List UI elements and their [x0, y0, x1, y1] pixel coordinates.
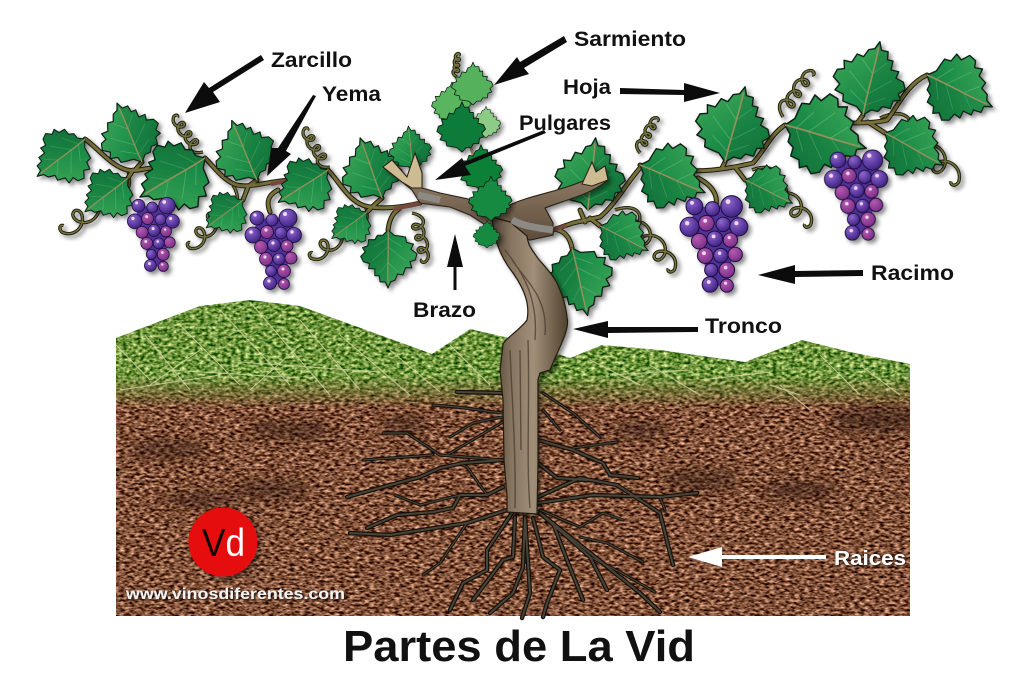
arrow: Racimo [758, 265, 863, 284]
label: Sarmiento [494, 28, 686, 85]
thumbs [383, 153, 608, 188]
tendrils [58, 54, 971, 274]
label: Zarcillo: Zarcillo [271, 49, 352, 72]
grass blades [116, 302, 900, 410]
arms [383, 153, 608, 240]
label: Tronco [573, 315, 782, 338]
vine canes and tendrils [58, 54, 971, 274]
label: Yema: Yema [322, 83, 381, 106]
label: Brazo: Brazo [413, 299, 476, 322]
label: Tronco: Tronco [705, 315, 782, 338]
arrow: Raices [688, 547, 826, 567]
leaves [20, 33, 1008, 323]
bark lines [505, 250, 545, 508]
central shoot leaves [432, 62, 512, 248]
canes outline [85, 75, 927, 248]
label: Pulgares: Pulgares [519, 112, 611, 135]
arrow: Sarmiento [494, 36, 567, 85]
logo: Vd: Vd [202, 522, 245, 565]
arrow: Brazo [447, 234, 463, 290]
label: Yema [267, 83, 381, 176]
arrow: Hoja [620, 83, 720, 102]
logo: Vd [188, 508, 258, 576]
soil [116, 372, 910, 616]
trunk and arms [383, 153, 608, 514]
shoot stem [468, 137, 483, 190]
arrow: Zarcillo [185, 55, 264, 113]
title: Partes de La Vid [343, 622, 695, 671]
label: Zarcillo [185, 49, 352, 113]
grape clusters [127, 150, 888, 292]
roots [347, 392, 697, 618]
label: Hoja: Hoja [563, 76, 611, 99]
label: Racimo: Racimo [871, 262, 954, 285]
brown cane bases [272, 168, 690, 230]
label: Racimo [758, 262, 954, 285]
label: Sarmiento: Sarmiento [574, 28, 686, 51]
canes [85, 75, 927, 248]
arrow: Pulgares [435, 130, 546, 180]
label: Brazo [413, 234, 476, 322]
label: Raices [688, 547, 906, 570]
label: Pulgares [435, 112, 611, 180]
grass hills [116, 300, 910, 412]
arrow: Tronco [573, 321, 698, 338]
label: Raices: Raices [834, 548, 906, 570]
website url: www.vinosdiferentes.com [125, 586, 345, 603]
ground panel: soil and grass [116, 300, 930, 616]
wire tie [418, 195, 553, 230]
trunk [492, 217, 568, 514]
arrow: Yema [267, 95, 316, 176]
dark soil patches [130, 406, 930, 508]
label: Hoja [563, 76, 720, 102]
